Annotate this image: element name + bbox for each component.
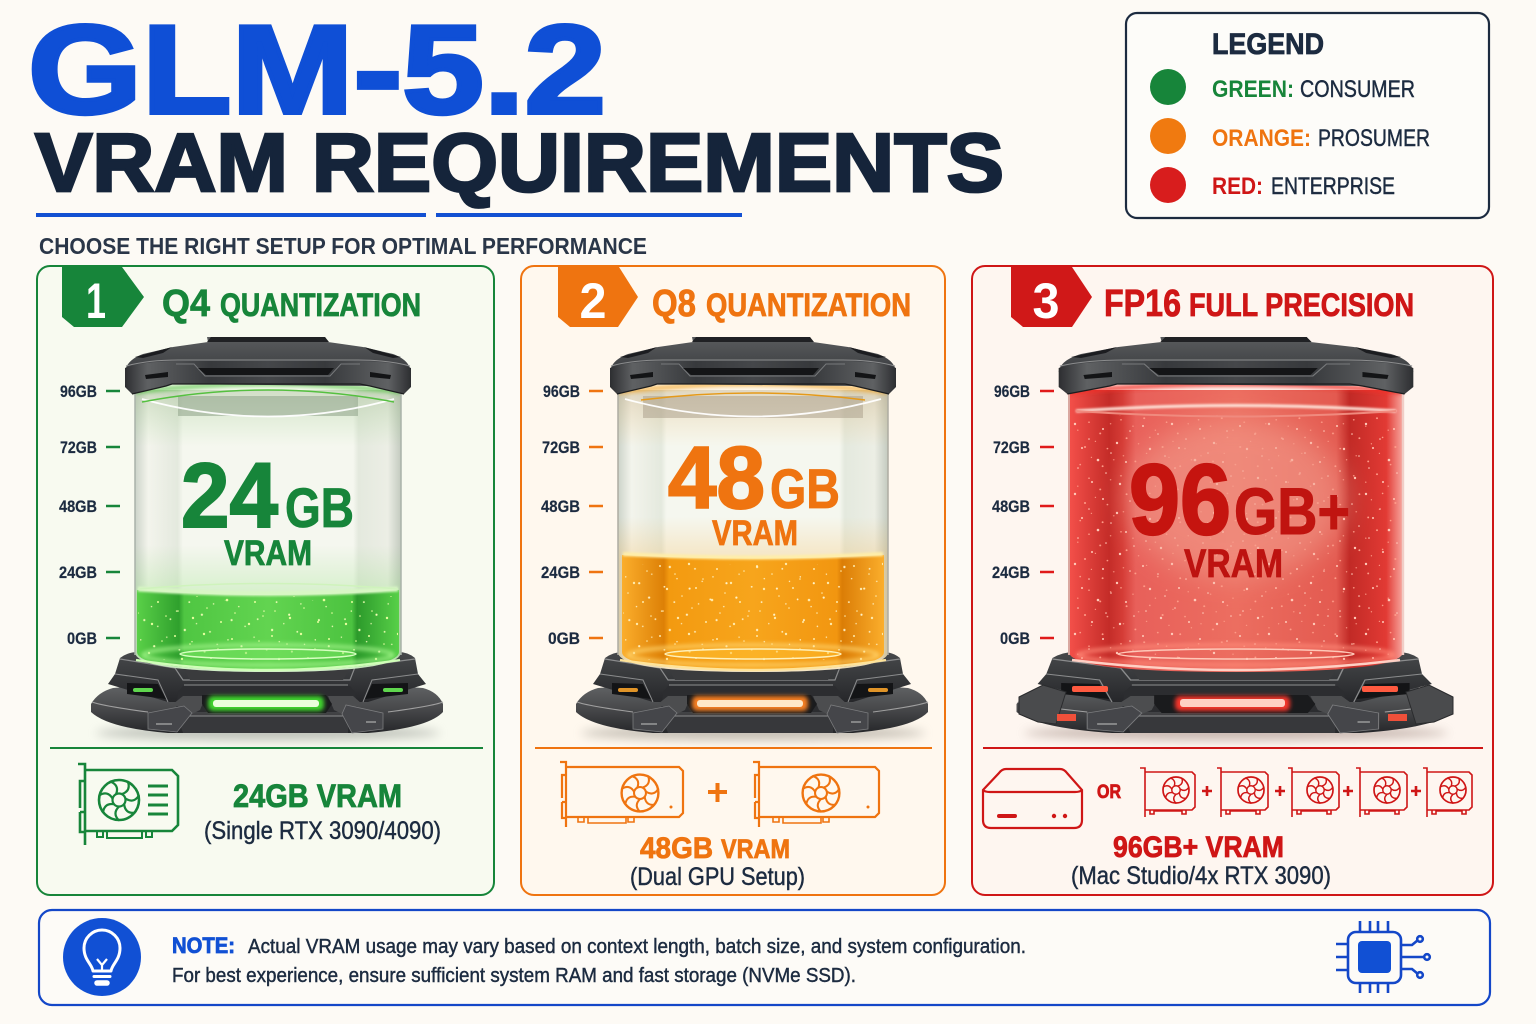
spec text xyxy=(204,778,441,845)
note text xyxy=(172,933,1026,987)
spec text: (Dual GPU Setup) xyxy=(630,863,805,891)
spec text: 96GB+ VRAM xyxy=(1113,831,1284,864)
big value: 48GB VRAM xyxy=(668,428,840,553)
scale labels: 48GB xyxy=(541,497,580,516)
spec text: (Mac Studio/4x RTX 3090) xyxy=(1071,862,1331,890)
badge 3: 3 xyxy=(1032,273,1060,329)
scale labels xyxy=(59,382,120,648)
legend xyxy=(1126,13,1489,218)
badge 1: 1 xyxy=(86,273,106,329)
scale labels: 96GB xyxy=(543,382,580,401)
scale labels: 0GB xyxy=(1000,629,1030,648)
legend: PROSUMER xyxy=(1318,125,1430,152)
heading: QUANTIZATION xyxy=(220,287,421,323)
scale labels: 24GB xyxy=(541,563,580,582)
legend: GREEN: xyxy=(1212,76,1294,103)
big value: 24GB VRAM: 24 xyxy=(181,445,278,547)
badge 2: 2 xyxy=(580,273,606,329)
scale labels: 0GB xyxy=(548,629,580,648)
big value: 48GB VRAM: VRAM xyxy=(712,514,798,553)
icon: first GPU card xyxy=(560,762,683,827)
note text: For best experience, ensure sufficient system RAM and fast storage (NVMe SSD). xyxy=(172,964,856,987)
icon: five GPU cards with plus signs xyxy=(1140,768,1472,817)
base lights xyxy=(618,688,888,711)
heading: FULL PRECISION xyxy=(1189,287,1414,323)
icon: light bulb xyxy=(63,918,141,996)
VRAM cylinder: green xyxy=(91,337,443,740)
heading: QUANTIZATION xyxy=(706,287,911,323)
legend: LEGEND xyxy=(1212,28,1324,61)
spec text xyxy=(630,832,805,891)
note text: Actual VRAM usage may vary based on context length, batch size, and system configuration. xyxy=(248,935,1026,958)
big value: 48GB VRAM: GB xyxy=(770,457,840,520)
heading: Q4 xyxy=(162,283,210,325)
legend: RED: xyxy=(1212,173,1263,200)
title xyxy=(28,0,1004,217)
big value: 48GB VRAM: 48 xyxy=(668,428,765,527)
title: GLM-5.2 xyxy=(28,0,606,140)
title: VRAM REQUIREMENTS xyxy=(35,116,1004,209)
badge 2 xyxy=(558,267,638,329)
heading xyxy=(1104,283,1414,325)
spec text xyxy=(1071,831,1331,890)
scale labels xyxy=(541,382,603,648)
base lights xyxy=(133,688,403,711)
OR label: OR xyxy=(1097,782,1121,803)
scale labels: 96GB xyxy=(60,382,97,401)
icon: chip xyxy=(1336,921,1430,993)
heading: Q8 xyxy=(652,283,696,325)
scale labels xyxy=(992,382,1054,648)
heading: FP16 xyxy=(1104,283,1181,325)
scale labels: 0GB xyxy=(67,629,97,648)
panel: Q4 quantization xyxy=(37,266,494,895)
badge 1 xyxy=(62,267,144,329)
heading xyxy=(162,283,421,325)
icon: Mac Studio xyxy=(983,769,1082,828)
icon: GPU card xyxy=(78,764,178,845)
big value: 24GB VRAM: GB xyxy=(285,476,354,539)
scale labels: 72GB xyxy=(60,438,97,457)
spec text: VRAM xyxy=(721,834,790,864)
big value: 96GB+ VRAM xyxy=(1129,444,1350,586)
VRAM cylinder: orange xyxy=(576,337,928,740)
panel: Q8 quantization xyxy=(521,266,945,895)
scale labels: 24GB xyxy=(992,563,1030,582)
big value: 24GB VRAM: VRAM xyxy=(224,534,312,573)
badge 3 xyxy=(1011,267,1092,329)
big value: 96GB+ VRAM: VRAM xyxy=(1184,542,1283,586)
scale labels: 48GB xyxy=(992,497,1030,516)
VRAM cylinder: red xyxy=(1017,337,1453,740)
spec text: 48GB xyxy=(640,832,713,865)
heading xyxy=(652,283,911,325)
plus xyxy=(708,783,727,802)
note text: NOTE: xyxy=(172,933,235,958)
legend: ORANGE: xyxy=(1212,125,1311,152)
base lights xyxy=(1057,686,1407,721)
spec text: 24GB VRAM xyxy=(233,778,402,814)
panel: FP16 full precision xyxy=(972,266,1493,895)
scale labels: 96GB xyxy=(994,382,1030,401)
scale labels: 72GB xyxy=(993,438,1030,457)
legend: CONSUMER xyxy=(1300,76,1415,103)
scale labels: 24GB xyxy=(59,563,97,582)
note bar xyxy=(39,910,1490,1005)
scale labels: 48GB xyxy=(59,497,97,516)
scale labels: 72GB xyxy=(542,438,580,457)
big value: 24GB VRAM xyxy=(181,445,354,573)
legend: ENTERPRISE xyxy=(1271,173,1395,200)
subtitle: CHOOSE THE RIGHT SETUP FOR OPTIMAL PERFORMANCE xyxy=(39,233,647,259)
big value: 96GB+ VRAM: 96 xyxy=(1129,444,1231,556)
icon: second GPU card xyxy=(753,762,879,827)
spec text: (Single RTX 3090/4090) xyxy=(204,817,441,845)
big value: 96GB+ VRAM: GB+ xyxy=(1234,474,1350,548)
